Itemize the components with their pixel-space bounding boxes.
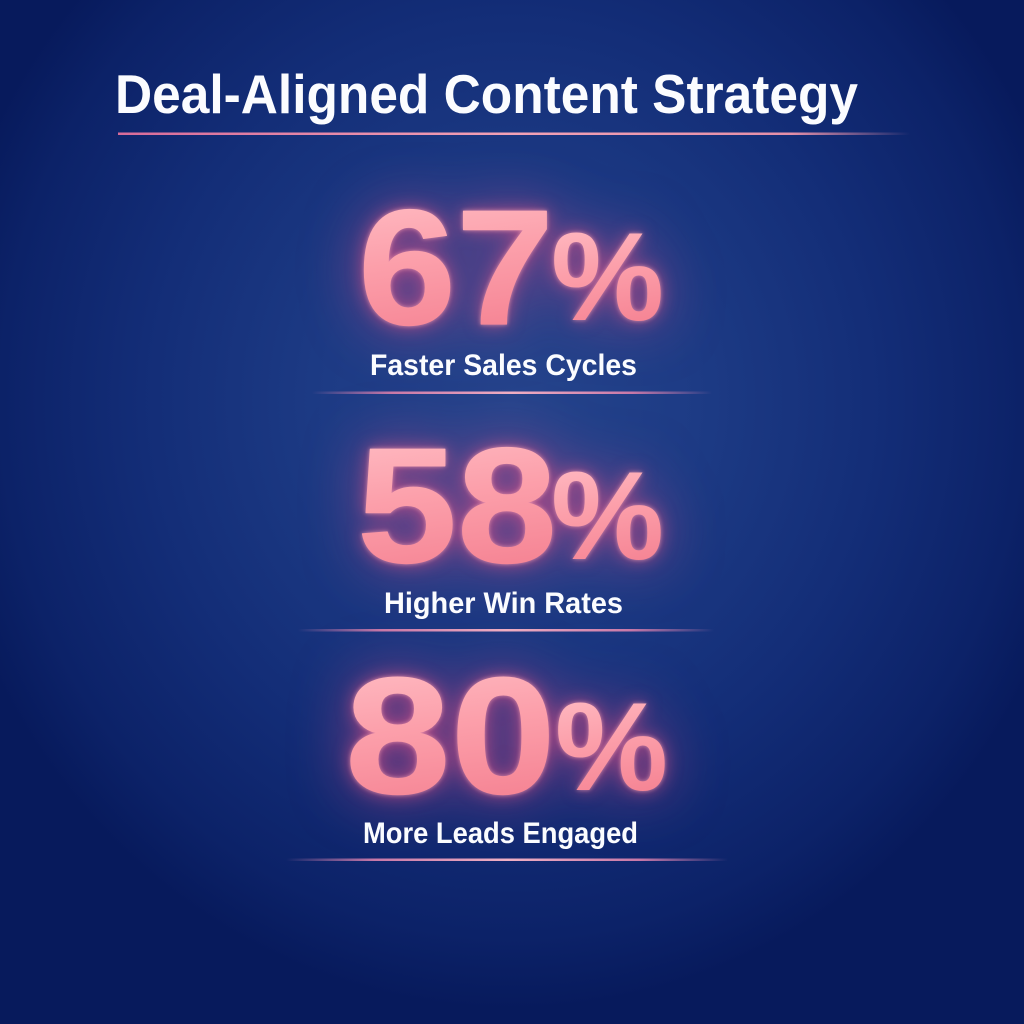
stat: 67% bbox=[312, 176, 712, 394]
stat: 80% bbox=[286, 644, 728, 861]
number: 80%: 80 bbox=[345, 644, 556, 829]
label: Faster Sales Cycles: Faster Sales Cycles bbox=[370, 349, 637, 382]
number: 58% bbox=[357, 414, 664, 597]
number: 67% bbox=[358, 176, 664, 359]
stat: 58% bbox=[298, 414, 714, 632]
number: 58%: % bbox=[551, 447, 664, 586]
title: Deal-Aligned Content Strategy bbox=[115, 63, 858, 125]
number: 80%: % bbox=[555, 678, 668, 817]
number: 67%: 67 bbox=[358, 176, 554, 359]
number: 58%: 58 bbox=[357, 414, 557, 597]
label: More Leads Engaged: More Leads Engaged bbox=[363, 817, 638, 850]
label: Higher Win Rates: Higher Win Rates bbox=[384, 587, 623, 620]
number: 67%: % bbox=[551, 208, 664, 347]
number: 80% bbox=[345, 644, 668, 829]
